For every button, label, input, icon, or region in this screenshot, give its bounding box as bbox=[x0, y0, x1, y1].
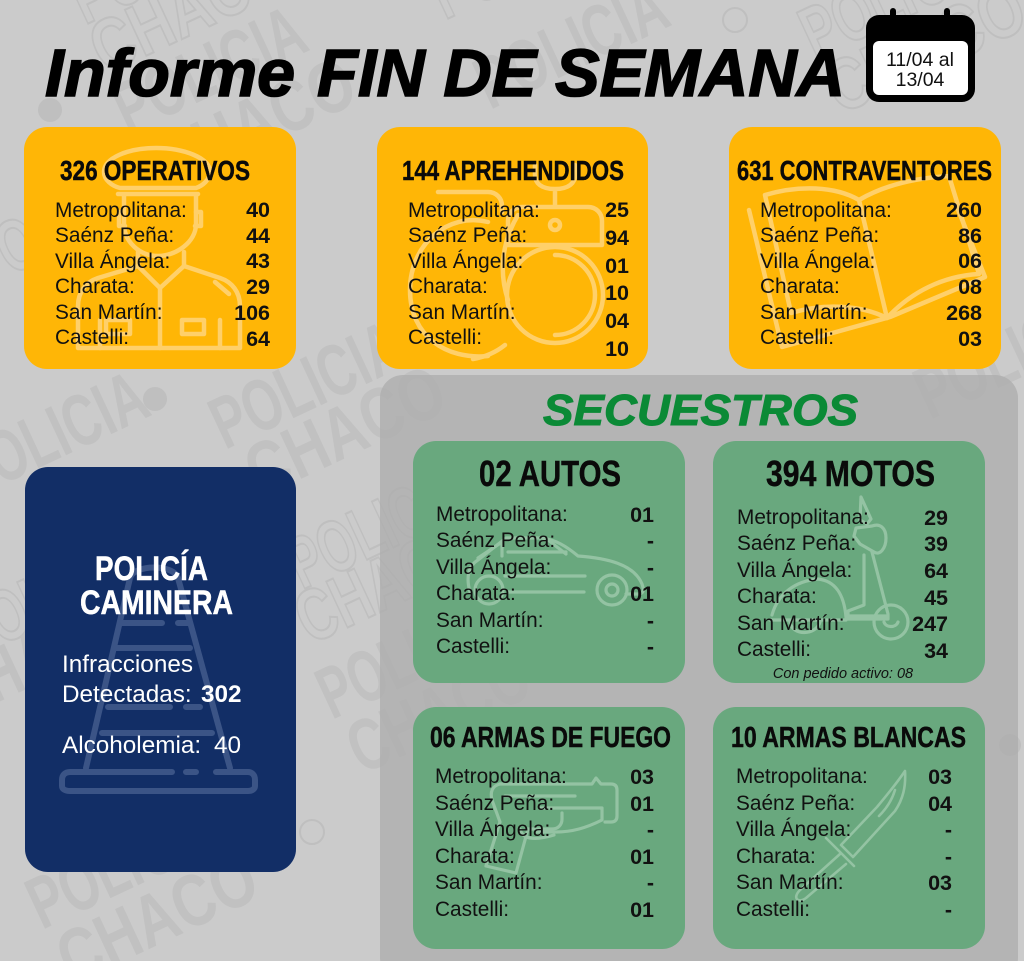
infractions and alcohol tests: Alcoholemia: bbox=[62, 732, 201, 759]
values: - bbox=[647, 609, 654, 633]
values: 94 bbox=[605, 226, 629, 250]
infractions and alcohol tests: Infracciones bbox=[62, 651, 193, 678]
icon: calendar with dates: 13/04 bbox=[896, 69, 945, 91]
values bbox=[630, 765, 654, 922]
labels: Saénz Peña: bbox=[736, 792, 855, 815]
infractions and alcohol tests: Detectadas: bbox=[62, 681, 192, 708]
icon: calendar with dates bbox=[866, 8, 975, 102]
watermark pattern: CHACO bbox=[232, 349, 458, 513]
values bbox=[946, 198, 982, 351]
labels: San Martín: bbox=[436, 609, 544, 632]
heading: SECUESTROS bbox=[543, 386, 858, 435]
title: 06 ARMAS DE FUEGO bbox=[430, 722, 671, 754]
labels: Saénz Peña: bbox=[408, 224, 527, 247]
values: 45 bbox=[924, 586, 948, 610]
labels: Metropolitana: bbox=[736, 765, 868, 788]
labels: Saénz Peña: bbox=[55, 224, 174, 247]
values: 03 bbox=[630, 765, 654, 789]
values: 247 bbox=[912, 612, 948, 636]
title: POLICÍA bbox=[95, 550, 208, 588]
icon: traffic cone bbox=[62, 568, 255, 791]
values: 01 bbox=[630, 792, 654, 816]
labels: Metropolitana: bbox=[435, 765, 567, 788]
values: 01 bbox=[630, 503, 654, 527]
icon: handcuffs bbox=[410, 165, 603, 359]
icon: knife bbox=[796, 771, 905, 900]
icon: police officer bbox=[78, 148, 240, 348]
labels: Castelli: bbox=[435, 898, 509, 921]
values: - bbox=[647, 818, 654, 842]
values: 43 bbox=[246, 249, 270, 273]
values: 39 bbox=[924, 532, 948, 556]
card: armas de fuego bbox=[413, 707, 685, 949]
values: 86 bbox=[958, 224, 982, 248]
watermark pattern: CHACO bbox=[142, 41, 368, 205]
watermark pattern: POLICIA bbox=[14, 785, 232, 945]
labels: San Martín: bbox=[737, 612, 844, 635]
labels: Villa Ángela: bbox=[55, 250, 170, 273]
labels: Villa Ángela: bbox=[436, 556, 551, 579]
labels: Saénz Peña: bbox=[760, 224, 879, 247]
values: - bbox=[647, 529, 654, 553]
values: - bbox=[647, 635, 654, 659]
values bbox=[912, 506, 948, 663]
labels: Saénz Peña: bbox=[435, 792, 554, 815]
infractions and alcohol tests bbox=[62, 651, 242, 759]
icon: pistol bbox=[486, 778, 617, 873]
values: 01 bbox=[630, 898, 654, 922]
values: 03 bbox=[958, 327, 982, 351]
labels bbox=[55, 199, 187, 349]
values: 08 bbox=[958, 275, 982, 299]
values: 10 bbox=[605, 337, 629, 361]
values: 10 bbox=[605, 281, 629, 305]
values: - bbox=[945, 898, 952, 922]
values bbox=[630, 503, 654, 659]
title: 326 OPERATIVOS bbox=[60, 155, 250, 186]
labels: Villa Ángela: bbox=[435, 818, 550, 841]
watermark pattern: CHACO bbox=[334, 633, 543, 790]
values bbox=[605, 198, 629, 361]
labels bbox=[435, 765, 567, 921]
title: CAMINERA bbox=[80, 584, 233, 622]
values: 04 bbox=[605, 309, 629, 333]
values: 40 bbox=[246, 198, 270, 222]
icon: open book bbox=[749, 176, 985, 347]
labels: Castelli: bbox=[55, 326, 129, 349]
labels: Charata: bbox=[736, 845, 816, 868]
values: 260 bbox=[946, 198, 982, 222]
watermark pattern: CHACO bbox=[282, 503, 491, 660]
labels: San Martín: bbox=[408, 301, 516, 324]
labels: Metropolitana: bbox=[436, 503, 568, 526]
values: 268 bbox=[946, 301, 982, 325]
labels: Castelli: bbox=[760, 326, 834, 349]
title: FIN DE SEMANA bbox=[317, 36, 845, 111]
labels: San Martín: bbox=[760, 301, 868, 324]
values: 29 bbox=[924, 506, 948, 530]
labels: Charata: bbox=[737, 585, 817, 608]
values bbox=[928, 765, 952, 922]
panel: policia caminera bbox=[25, 467, 296, 872]
card: armas blancas bbox=[713, 707, 985, 949]
title: 10 ARMAS BLANCAS bbox=[731, 722, 966, 754]
labels: Metropolitana: bbox=[737, 506, 869, 529]
labels: Villa Ángela: bbox=[408, 250, 523, 273]
labels: Saénz Peña: bbox=[737, 532, 856, 555]
values: 03 bbox=[928, 871, 952, 895]
values: 01 bbox=[605, 254, 629, 278]
labels: Metropolitana: bbox=[55, 199, 187, 222]
labels: Villa Ángela: bbox=[737, 559, 852, 582]
card: motos bbox=[713, 441, 985, 683]
infractions and alcohol tests: 40 bbox=[214, 732, 241, 759]
watermark pattern: POLICIA bbox=[304, 580, 513, 735]
panel: contraventores bbox=[729, 127, 1001, 369]
values: 64 bbox=[246, 327, 270, 351]
labels: Villa Ángela: bbox=[736, 818, 851, 841]
values: 64 bbox=[924, 559, 948, 583]
title bbox=[80, 550, 233, 622]
panel: aprehendidos bbox=[377, 127, 648, 369]
labels bbox=[736, 765, 868, 921]
labels: Castelli: bbox=[736, 898, 810, 921]
values: 44 bbox=[246, 224, 270, 248]
infractions and alcohol tests: 302 bbox=[201, 681, 242, 708]
labels: Saénz Peña: bbox=[436, 529, 555, 552]
values: 03 bbox=[928, 765, 952, 789]
labels: San Martín: bbox=[55, 301, 162, 324]
labels: San Martín: bbox=[435, 871, 542, 894]
labels bbox=[760, 199, 892, 349]
title: 144 APREHENDIDOS bbox=[402, 155, 624, 186]
values: - bbox=[647, 871, 654, 895]
note: Con pedido activo: 08 bbox=[773, 666, 913, 682]
labels: Charata: bbox=[760, 275, 840, 298]
labels: San Martín: bbox=[736, 871, 844, 894]
values: 06 bbox=[958, 249, 982, 273]
icon: car bbox=[468, 538, 643, 605]
title: Informe bbox=[45, 36, 295, 111]
labels: Charata: bbox=[408, 275, 488, 298]
icon: calendar with dates: 11/04 al bbox=[886, 49, 954, 71]
values: - bbox=[647, 556, 654, 580]
labels bbox=[408, 199, 540, 349]
card: autos bbox=[413, 441, 685, 683]
values: 106 bbox=[234, 301, 270, 325]
labels: Castelli: bbox=[737, 638, 811, 661]
labels: Charata: bbox=[436, 582, 516, 605]
values: - bbox=[945, 818, 952, 842]
values: 25 bbox=[605, 198, 629, 222]
labels: Charata: bbox=[55, 275, 135, 298]
values: 01 bbox=[630, 582, 654, 606]
values bbox=[234, 198, 270, 351]
values: - bbox=[945, 845, 952, 869]
watermark pattern: POLICIA bbox=[197, 305, 415, 465]
title: 394 MOTOS bbox=[766, 453, 935, 494]
labels: Metropolitana: bbox=[408, 199, 540, 222]
panel: secuestros bbox=[380, 375, 1018, 961]
title bbox=[45, 36, 845, 111]
values: 01 bbox=[630, 845, 654, 869]
icon: scooter bbox=[770, 497, 908, 639]
values: 29 bbox=[246, 275, 270, 299]
panel: operativos bbox=[24, 127, 296, 369]
labels bbox=[436, 503, 568, 658]
labels bbox=[737, 506, 869, 661]
values: 34 bbox=[924, 639, 948, 663]
watermark pattern: POLICIA bbox=[274, 450, 483, 605]
title: 02 AUTOS bbox=[479, 453, 621, 494]
labels: Castelli: bbox=[408, 326, 482, 349]
labels: Charata: bbox=[435, 845, 515, 868]
labels: Villa Ángela: bbox=[760, 250, 875, 273]
labels: Metropolitana: bbox=[760, 199, 892, 222]
values: 04 bbox=[928, 792, 952, 816]
labels: Castelli: bbox=[436, 635, 510, 658]
